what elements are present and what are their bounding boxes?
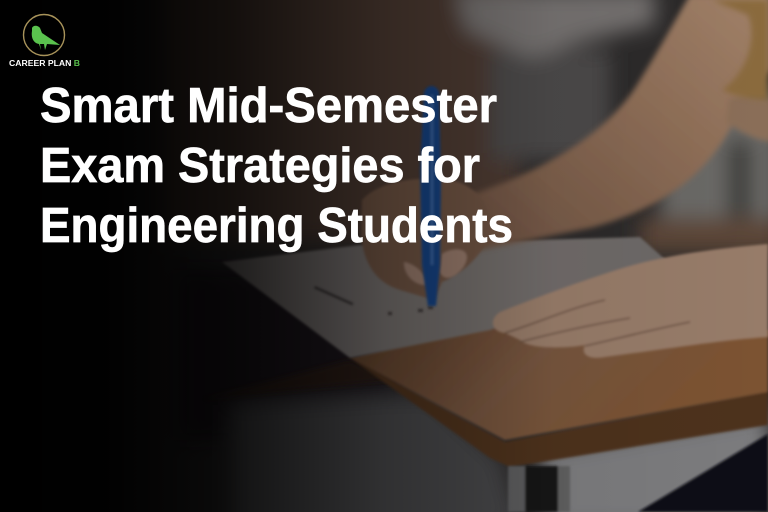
logo text: CAREER PLAN B xyxy=(9,59,80,68)
dark sleeve xyxy=(638,434,768,512)
title: Engineering Students xyxy=(40,199,513,253)
writing hand xyxy=(361,179,491,300)
logo xyxy=(9,14,80,68)
title: Smart Mid-Semester xyxy=(40,79,497,133)
hair xyxy=(712,0,768,100)
title xyxy=(40,79,513,253)
desk leg xyxy=(508,466,570,512)
writing arm xyxy=(470,0,768,252)
blue pen xyxy=(420,86,441,306)
icon: green bird xyxy=(32,26,60,50)
title: Exam Strategies for xyxy=(40,139,480,193)
desk xyxy=(350,318,768,467)
logo ring xyxy=(24,14,64,56)
resting hand xyxy=(493,244,768,358)
paper text xyxy=(314,286,433,315)
exam paper xyxy=(222,237,668,358)
